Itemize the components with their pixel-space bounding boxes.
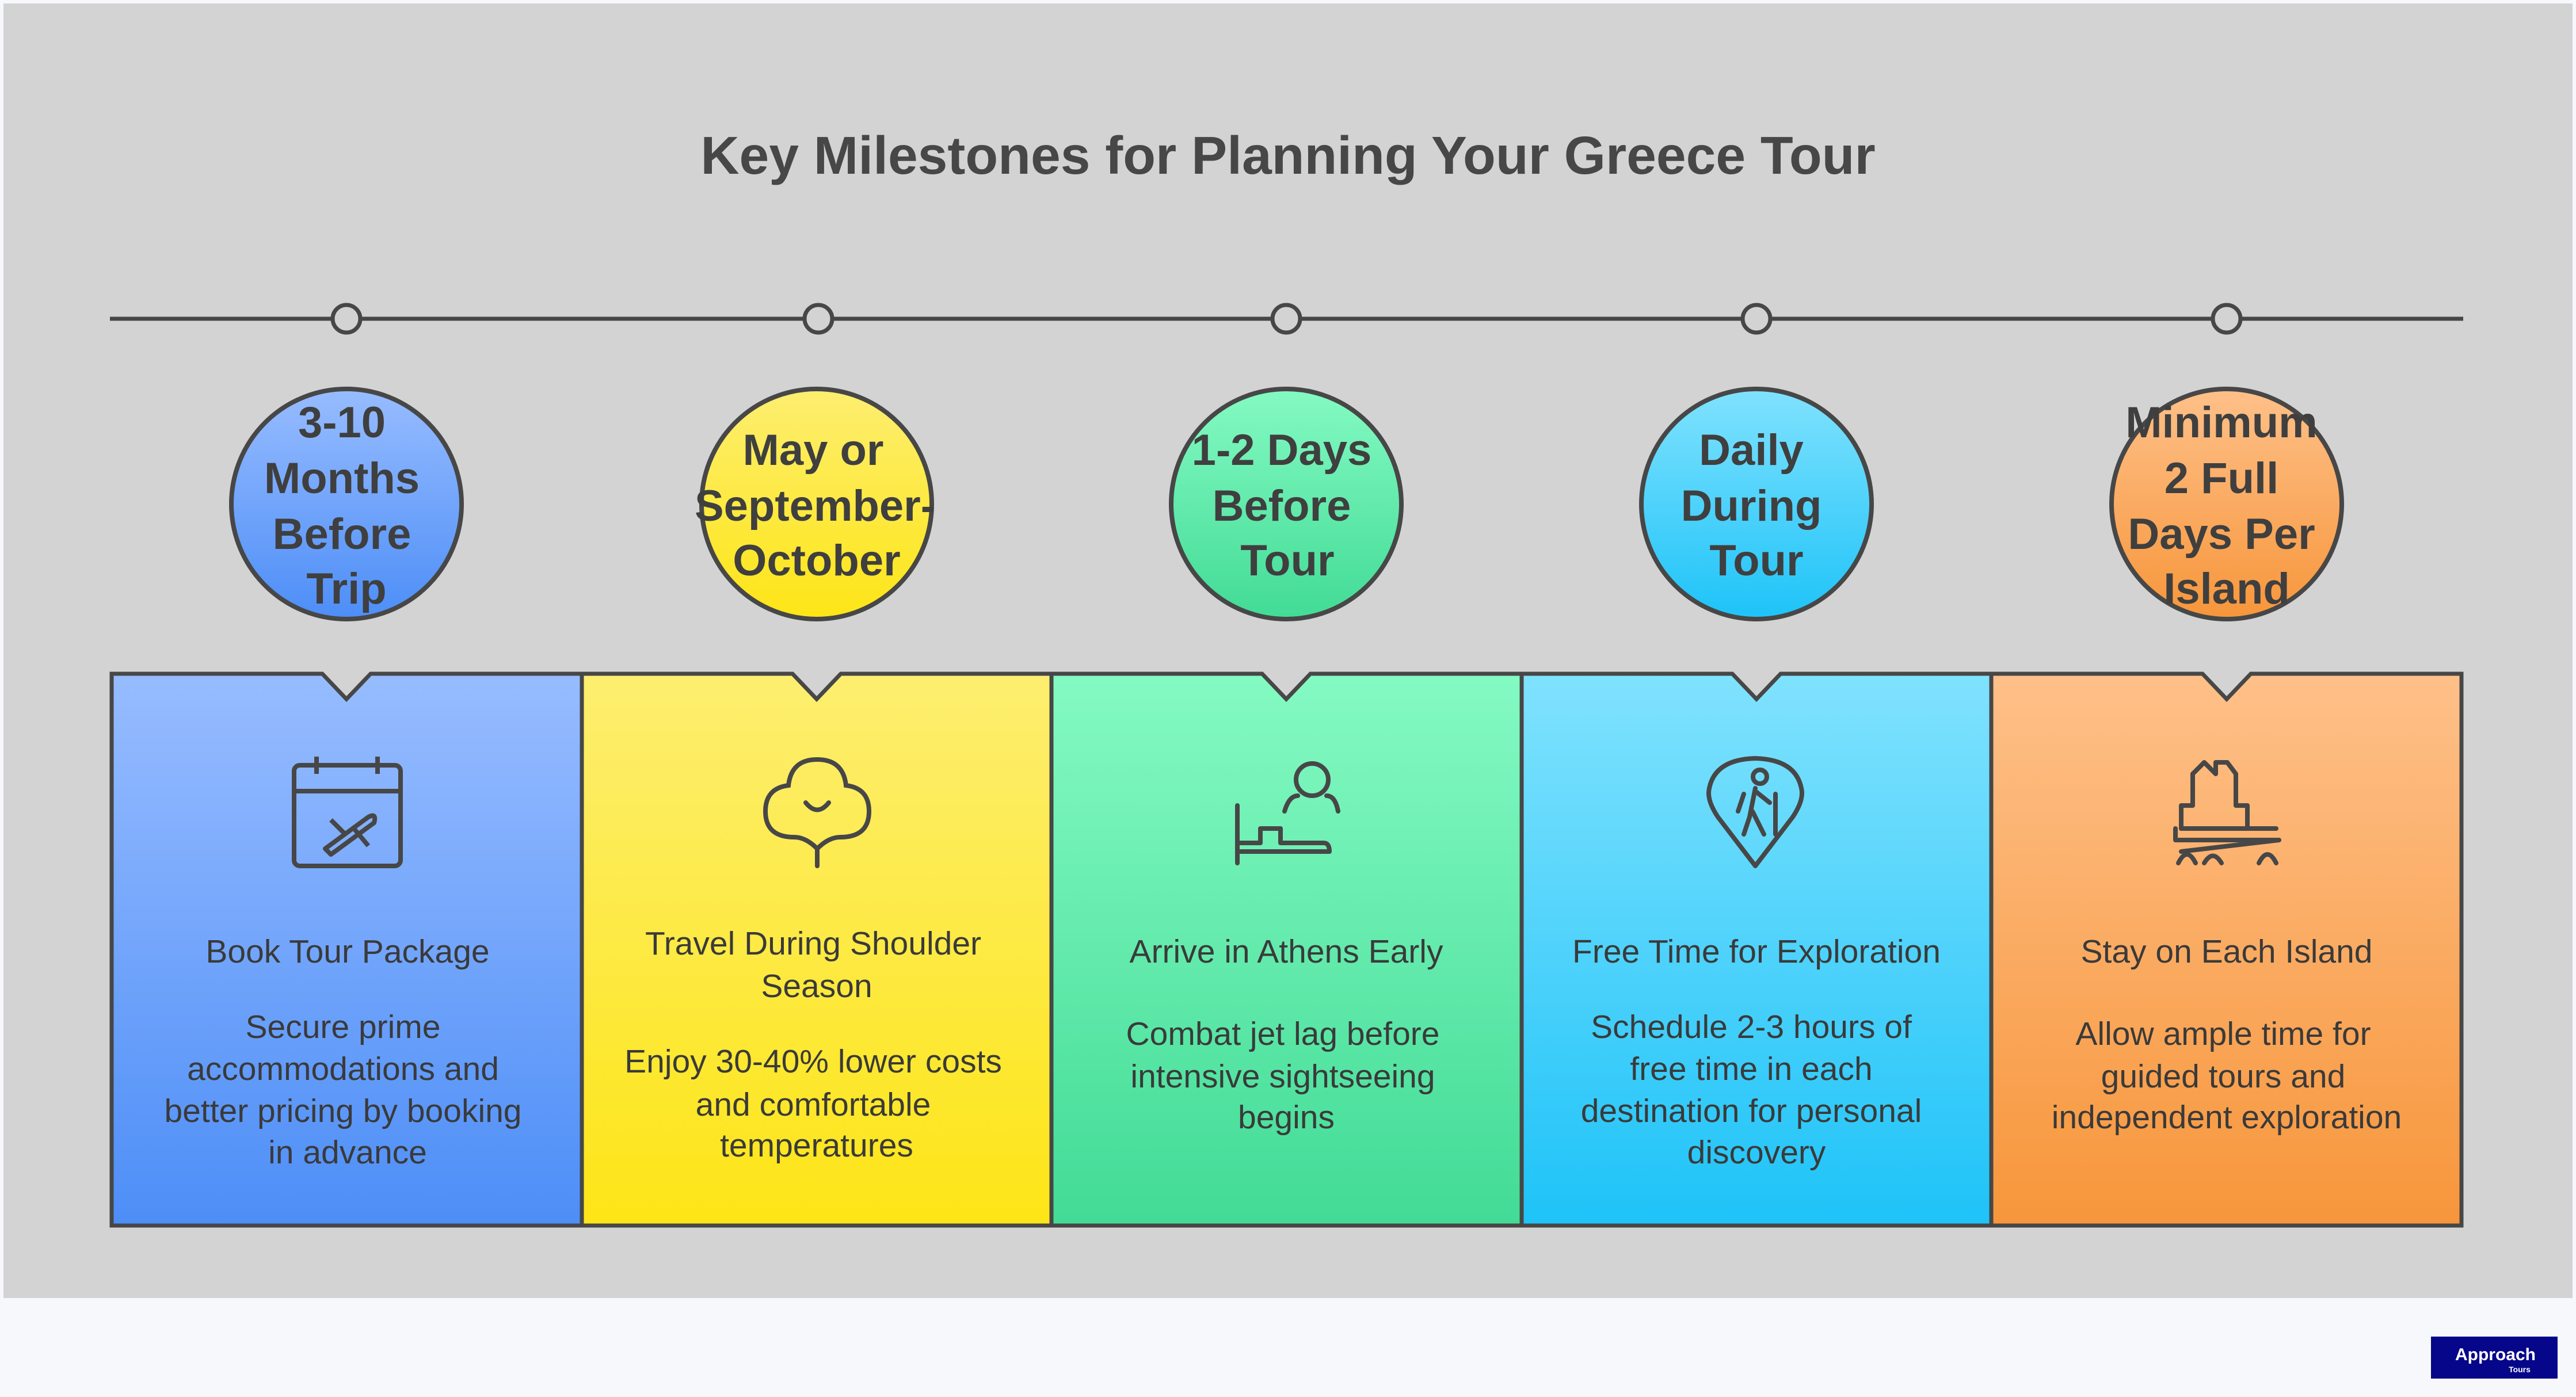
panel 5: stay on each island: Allow ample time for (2075, 1016, 2371, 1052)
panel 4: free time (1522, 674, 1991, 1226)
panel 5: stay on each island: independent exploration (2052, 1099, 2402, 1136)
milestone circle 2: September- (695, 482, 935, 530)
milestone circle 5: 2 Full (2165, 454, 2278, 503)
milestone circle 1: Trip (306, 564, 387, 613)
milestone circle 5: Island (2163, 564, 2290, 613)
panel 3: arrive early: begins (1238, 1099, 1335, 1136)
panel 4: free time: free time in each (1630, 1051, 1873, 1087)
milestone circle 5 (2112, 389, 2342, 619)
milestone circle 2 (695, 389, 935, 619)
panel 2: shoulder season: Travel During Shoulder (645, 925, 981, 962)
logo: Approach (2455, 1345, 2536, 1364)
panel 3: arrive early: Combat jet lag before (1126, 1016, 1439, 1052)
panel 2: shoulder season: temperatures (720, 1127, 913, 1164)
icon: tree / cloud (765, 759, 869, 866)
timeline (110, 305, 2463, 333)
milestone circle 4: During (1681, 482, 1822, 530)
milestone circle 4: Daily (1699, 426, 1804, 475)
panel 2: shoulder season (582, 674, 1051, 1226)
milestone circle 4 (1641, 389, 1872, 619)
milestone circle 3: Before (1213, 482, 1351, 530)
panel 2: shoulder season: Enjoy 30-40% lower costs (624, 1043, 1002, 1080)
panel 1: book tour package: better pricing by booking (164, 1093, 522, 1129)
panel 4: free time: discovery (1687, 1134, 1826, 1171)
milestone circle 3 (1171, 389, 1401, 619)
milestone circle 3: Tour (1240, 536, 1335, 585)
milestone circle 1: Before (273, 510, 411, 559)
panel 4: free time: Schedule 2-3 hours of (1591, 1009, 1912, 1045)
milestone circle 1 (231, 389, 462, 619)
panel 1: book tour package: Book Tour Package (205, 933, 490, 970)
title: Key Milestones for Planning Your Greece Tour (700, 125, 1876, 185)
panel 4: free time: destination for personal (1581, 1093, 1922, 1129)
milestone circle 3: 1-2 Days (1192, 426, 1371, 475)
panel 5: stay on each island: Stay on Each Island (2081, 933, 2372, 970)
icon: island buildings (2175, 762, 2279, 863)
panel 1: book tour package: in advance (268, 1134, 427, 1171)
panel 3: arrive early: Arrive in Athens Early (1130, 933, 1443, 970)
panel 5: stay on each island (1991, 674, 2461, 1226)
milestone circle 2: May or (743, 426, 883, 475)
panel 5: stay on each island: guided tours and (2101, 1058, 2345, 1095)
panel 2: shoulder season: Season (761, 968, 872, 1005)
icon: calendar plane (294, 757, 401, 866)
milestone circle 4: Tour (1709, 536, 1804, 585)
panel 4: free time: Free Time for Exploration (1572, 933, 1941, 970)
panel 3: arrive early: intensive sightseeing (1130, 1058, 1435, 1095)
icon: person resting bed (1237, 764, 1338, 863)
logo: Tours (2509, 1365, 2531, 1374)
milestone circle 1: 3-10 (298, 398, 386, 447)
icon: hiker pin (1709, 758, 1802, 866)
panel 1: book tour package: Secure prime (246, 1009, 440, 1045)
milestone circle 2: October (733, 536, 901, 585)
logo (2431, 1337, 2558, 1379)
milestone circle 5: Minimum (2125, 398, 2318, 447)
panel 1: book tour package: accommodations and (187, 1051, 499, 1087)
panel 1: book tour package (112, 674, 582, 1226)
milestone circle 5: Days Per (2128, 510, 2315, 559)
panel 2: shoulder season: and comfortable (696, 1086, 931, 1123)
panel 3: arrive early (1051, 674, 1522, 1226)
milestone circle 1: Months (264, 454, 420, 503)
